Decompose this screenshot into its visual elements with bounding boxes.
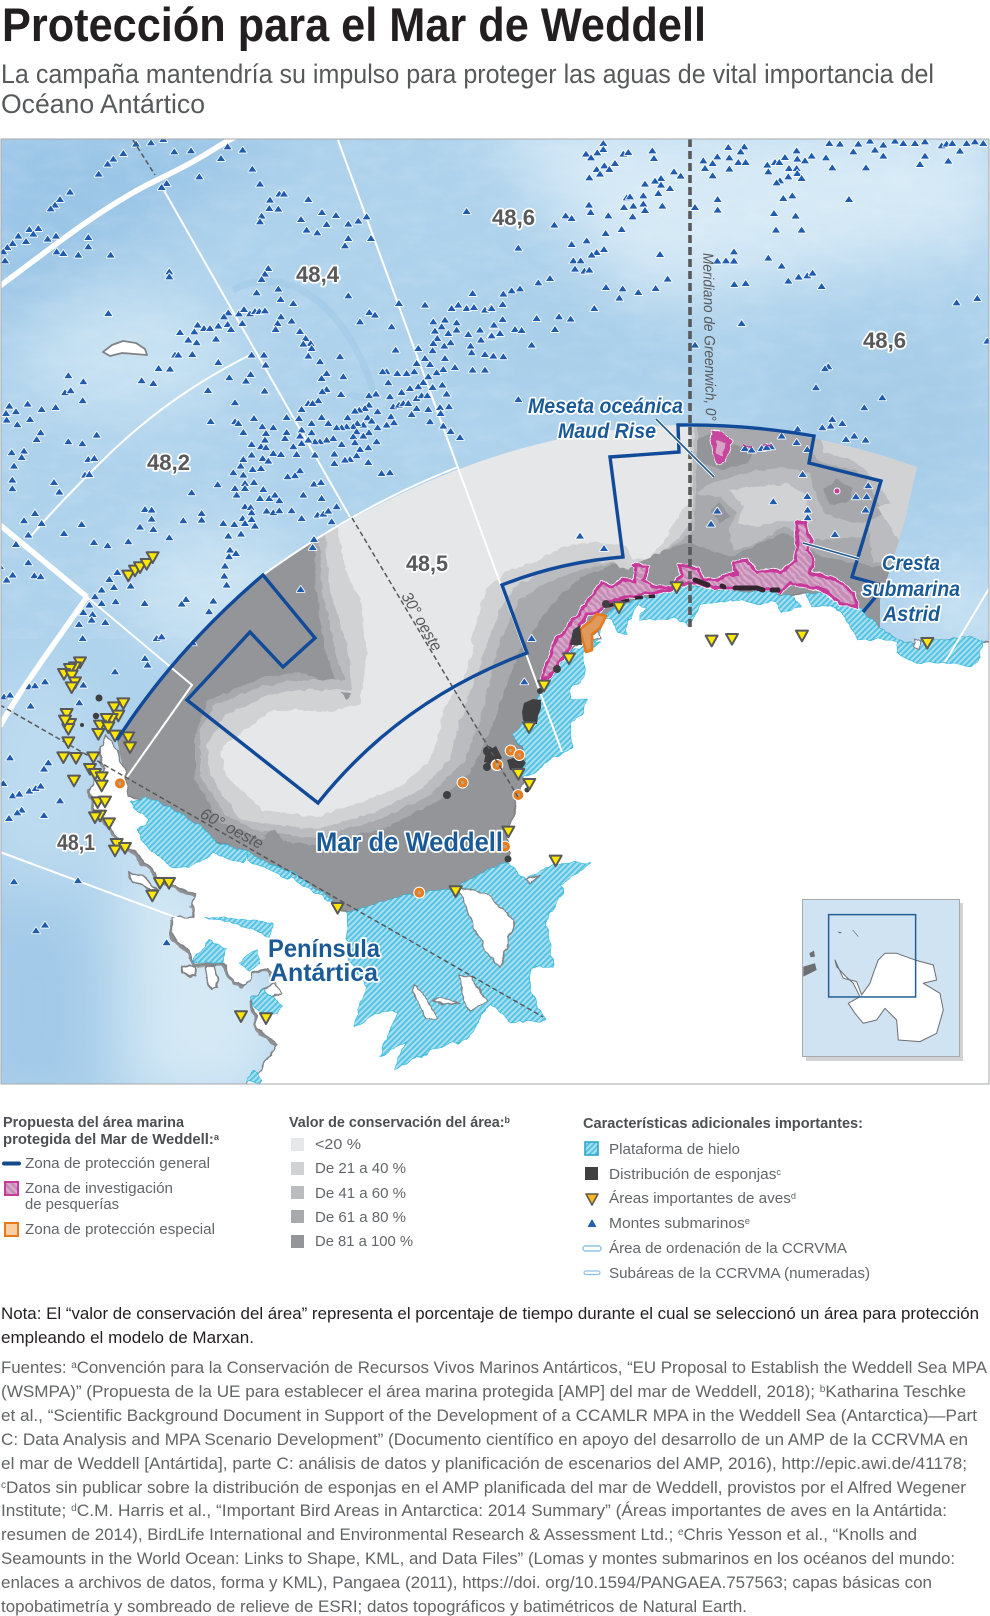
place labels: Meseta oceánica bbox=[528, 395, 683, 418]
CCAMLR subareas item: Subáreas de la CCRVMA (numeradas) bbox=[609, 1265, 870, 1282]
fisheries research item bbox=[5, 1180, 173, 1213]
ice shelf hatching bbox=[131, 584, 983, 1084]
meridian lines bbox=[0, 139, 690, 1017]
sources: Katharina Teschke bbox=[825, 1382, 966, 1401]
item 81 to 100: De 81 a 100 % bbox=[315, 1233, 413, 1250]
legend heading: Valor de conservación del área: bbox=[289, 1115, 507, 1131]
leader lines bbox=[656, 419, 859, 559]
sources: Seamounts in the World Ocean: Links to Shape, KML, and Data Files” (Lomas y montes submarinos en los océanos del mundo: bbox=[1, 1549, 955, 1568]
subarea lines bbox=[0, 137, 990, 920]
special sites (orange circles) bbox=[120, 765, 497, 893]
legend: conservation value bbox=[289, 1115, 510, 1250]
fisheries research item: de pesquerías bbox=[25, 1196, 119, 1213]
sources: Datos sin publicar sobre la distribución de esponjas en el AMP planificada del mar de Weddell, provistos por el Alfred Wegener bbox=[6, 1478, 966, 1497]
coast and land group bbox=[88, 583, 990, 1100]
antarctic land bbox=[90, 583, 990, 1100]
sources: (WSMPA)” (Propuesta de la UE para establecer el área marina protegida [AMP] del mar de Weddell, 2018); bbox=[1, 1382, 809, 1401]
sources: Fuentes: bbox=[1, 1358, 67, 1377]
item 41 to 60: De 41 a 60 % bbox=[315, 1185, 406, 1202]
place labels: Mar de Weddell bbox=[316, 827, 503, 857]
legend: proposed MPA bbox=[3, 1115, 220, 1238]
place labels: Cresta bbox=[882, 552, 940, 575]
birds item: Áreas importantes de aves bbox=[609, 1190, 787, 1207]
meridian labels: Meridiano de Greenwich, 0° bbox=[699, 253, 719, 421]
special protection item: Zona de protección especial bbox=[25, 1221, 215, 1238]
conservation value zones bbox=[117, 425, 917, 912]
item under 20 bbox=[291, 1136, 361, 1153]
ice shelf item: Plataforma de hielo bbox=[609, 1141, 740, 1158]
pink point bbox=[834, 488, 840, 494]
note bbox=[1, 1304, 979, 1347]
subarea numbers: 48,6 bbox=[863, 328, 906, 353]
item under 20: <20 % bbox=[315, 1136, 361, 1153]
seamounts item: e bbox=[745, 1216, 750, 1226]
sources: Institute; bbox=[1, 1501, 65, 1520]
meridian labels: 60° oeste bbox=[197, 806, 266, 853]
subarea numbers bbox=[57, 205, 906, 855]
sources: Convención para la Conservación de Recursos Vivos Marinos Antárticos, “EU Proposal to Establish the Weddell Sea MPA bbox=[77, 1358, 988, 1377]
important bird areas bbox=[63, 662, 456, 1018]
meridian labels bbox=[197, 253, 719, 853]
seamounts item: Montes submarinos bbox=[609, 1215, 740, 1232]
map panel bbox=[0, 120, 990, 1100]
place labels: Astrid bbox=[882, 603, 941, 626]
legend heading: Características adicionales importantes: bbox=[583, 1116, 863, 1132]
subarea numbers: 48,1 bbox=[57, 830, 95, 855]
sources: topobatimetría y sombreado de relieve de ESRI; datos topográficos y batimétricos de Natural Earth. bbox=[1, 1597, 747, 1616]
sources: Chris Yesson et al., “Knolls and bbox=[684, 1525, 917, 1544]
sources: et al., “Scientific Background Document in Support of the Development of a CCAMLR MPA in the Weddell Sea (Antarctica)—Part bbox=[1, 1406, 977, 1425]
sources: e bbox=[678, 1527, 684, 1538]
legend heading: protegida del Mar de Weddell: bbox=[3, 1132, 209, 1148]
legend heading bbox=[3, 1115, 220, 1148]
white islands in shelves bbox=[413, 632, 921, 1018]
ocean background bbox=[0, 120, 990, 1100]
sponges item: c bbox=[776, 1167, 782, 1177]
sources: enlaces a archivos de datos, forma y KML), Pangaea (2011), https://doi. org/10.1594/PANGAEA.757563; capas básicas con bbox=[1, 1573, 932, 1592]
ice shelf outline bbox=[130, 583, 983, 1083]
CCAMLR area item: Área de ordenación de la CCRVMA bbox=[609, 1240, 847, 1257]
land shadow bbox=[86, 746, 276, 1046]
proposed MPA boundary bbox=[117, 425, 885, 803]
place labels: submarina bbox=[862, 578, 960, 601]
sources: c bbox=[1, 1480, 6, 1491]
legend heading: Propuesta del área marina bbox=[3, 1115, 185, 1131]
seamounts bbox=[0, 139, 494, 624]
subarea numbers: 48,6 bbox=[492, 205, 535, 230]
legend heading: b bbox=[505, 1115, 510, 1125]
peninsula islands bbox=[128, 873, 282, 998]
note: empleando el modelo de Marxan. bbox=[1, 1328, 254, 1347]
sources: resumen de 2014), BirdLife International and Environmental Research & Assessment Ltd.; bbox=[1, 1525, 679, 1544]
birds item: d bbox=[791, 1191, 796, 1201]
place labels bbox=[268, 395, 960, 987]
item 21 to 40: De 21 a 40 % bbox=[315, 1160, 406, 1177]
sponge distribution bbox=[80, 580, 778, 862]
sponges item: Distribución de esponjas bbox=[609, 1166, 772, 1183]
sources: b bbox=[820, 1384, 826, 1395]
south georgia island bbox=[103, 341, 147, 356]
sources bbox=[1, 1358, 988, 1616]
sources: d bbox=[71, 1503, 77, 1514]
place labels: Antártica bbox=[270, 959, 379, 987]
legend: additional features bbox=[583, 1116, 870, 1282]
sources: el mar de Weddell [Antártida], parte C: análisis de datos y planificación de escenarios del AMP, 2016), http://epic.awi.de/41178; bbox=[1, 1454, 967, 1473]
meridian labels: 30° oeste bbox=[398, 590, 445, 654]
sources: C: Data Analysis and MPA Scenario Development” (Documento científico en apoyo del desarrollo de un AMP de la CCRVMA en bbox=[1, 1430, 968, 1449]
legend heading: a bbox=[214, 1132, 220, 1142]
fisheries research zone (pink) bbox=[542, 430, 857, 680]
note: Nota: El “valor de conservación del área” representa el porcentaje de tiempo durante el cual se seleccionó un área para protección bbox=[1, 1304, 979, 1323]
general protection item: Zona de protección general bbox=[25, 1155, 210, 1172]
locator inset bbox=[802, 900, 963, 1061]
map border bbox=[1, 139, 989, 1084]
place labels: Maud Rise bbox=[558, 420, 656, 443]
subtitle bbox=[1, 59, 934, 119]
sources: C.M. Harris et al., “Important Bird Areas in Antarctica: 2014 Summary” (Áreas importantes de aves en la Antártida: bbox=[77, 1501, 947, 1520]
sources: a bbox=[71, 1360, 77, 1371]
subarea numbers: 48,5 bbox=[406, 551, 448, 576]
special protection zone (orange) bbox=[580, 614, 606, 652]
item 61 to 80: De 61 a 80 % bbox=[315, 1209, 406, 1226]
subtitle: Océano Antártico bbox=[1, 89, 205, 119]
subarea numbers: 48,2 bbox=[147, 450, 190, 475]
subarea numbers: 48,4 bbox=[296, 262, 340, 287]
subtitle: La campaña mantendría su impulso para proteger las aguas de vital importancia del bbox=[1, 59, 934, 89]
fisheries research item: Zona de investigación bbox=[25, 1180, 173, 1197]
place labels: Península bbox=[268, 935, 381, 963]
